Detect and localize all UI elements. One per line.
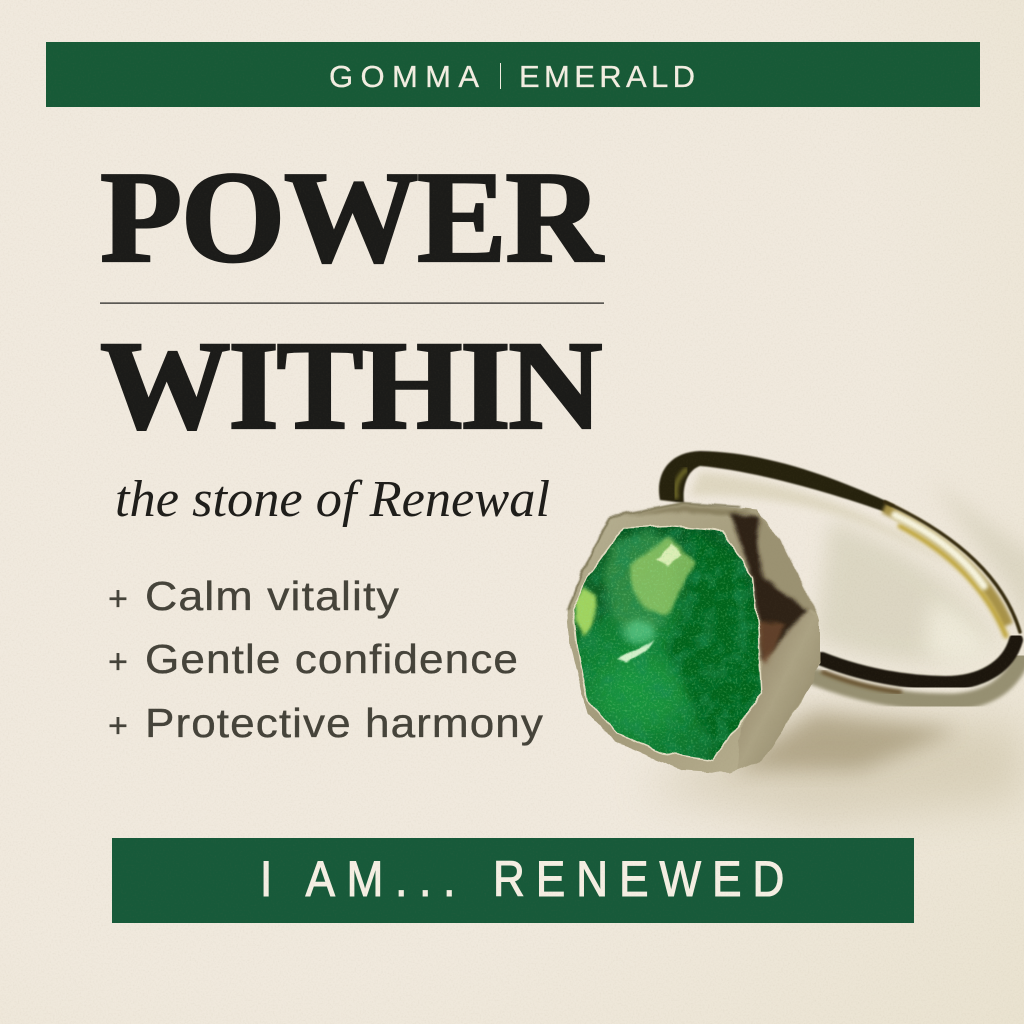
benefits list [108,573,544,746]
stone shading [665,530,765,765]
band white highlight [895,515,984,586]
ring band [659,451,1021,702]
band right outer dark edge [885,502,1020,632]
bottom affirmation banner [112,838,914,923]
band right tan base [884,508,1008,625]
band back olive tint [676,470,686,497]
brand label: EMERALD [519,59,695,94]
left light facet [574,587,596,636]
band brown reflection [823,672,900,692]
benefit: protective harmony: + [108,707,128,745]
bright highlight [617,640,654,663]
subtitle: the stone of Renewal [115,471,550,528]
benefit: gentle confidence: + [108,643,128,681]
title: POWER [100,145,605,290]
emerald ring photo [560,451,1024,825]
stone speckle texture [574,526,760,760]
benefit: calm vitality: + [108,580,128,618]
band gold inner edge [900,526,1006,636]
emerald stone [572,524,763,762]
brand label: GOMMA [329,59,479,94]
title [100,145,605,456]
affirmation text [260,850,784,907]
band back dark section [659,451,895,512]
brand label [329,59,695,94]
benefit: calm vitality: Calm vitality [145,573,400,619]
bezel [567,503,820,773]
bezel inner lip [572,526,762,760]
band front dark section [822,640,1016,683]
light crystal facet [630,537,695,615]
top banner [46,42,980,107]
benefit: protective harmony: Protective harmony [145,700,544,746]
ring shadows [640,472,1024,825]
title: WITHIN [100,315,603,456]
affirmation text: RENEWED [493,850,784,907]
affirmation text: I AM... [260,850,455,907]
benefit: gentle confidence: Gentle confidence [145,636,519,682]
band lower pale metal [815,660,1021,702]
